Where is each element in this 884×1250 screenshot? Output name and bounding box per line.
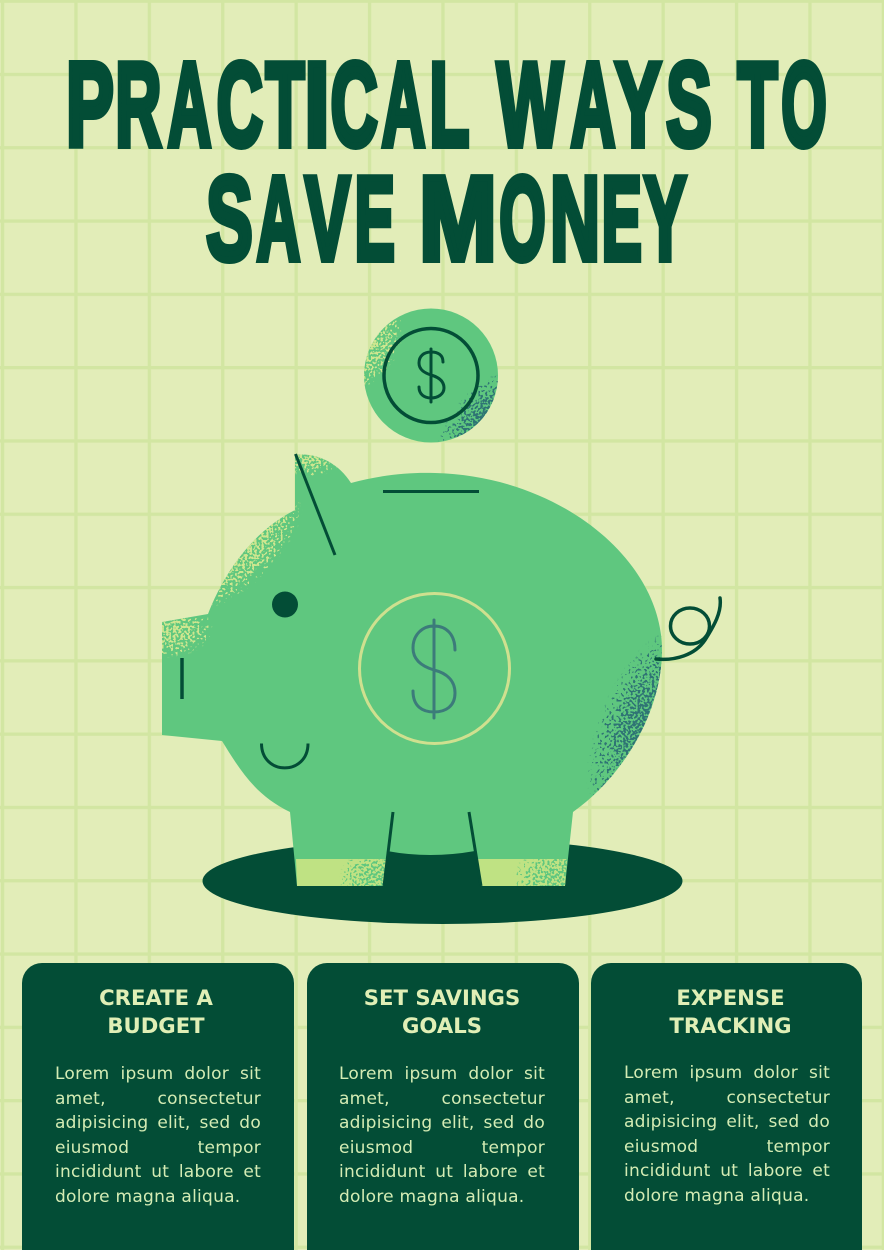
heading: GOALS <box>402 1013 482 1038</box>
heading <box>364 985 520 1038</box>
body text: amet, consectetur <box>55 1089 261 1109</box>
heading <box>99 985 213 1038</box>
body text: incididunt ut labore et <box>55 1162 261 1182</box>
coin slot <box>383 490 479 493</box>
body text <box>624 1063 830 1206</box>
heading <box>669 985 792 1038</box>
leg lines <box>384 812 481 886</box>
title: Y <box>644 152 686 286</box>
hoof speckle <box>340 859 567 886</box>
heading: BUDGET <box>107 1013 205 1038</box>
piggy bank <box>162 454 722 886</box>
title: A <box>571 38 615 172</box>
snout line <box>180 658 184 699</box>
icon: falling coin <box>364 308 498 442</box>
ground shadow <box>202 838 682 924</box>
body speckle <box>162 454 662 795</box>
body text: incididunt ut labore et <box>339 1162 545 1182</box>
heading: CREATE A <box>99 985 213 1010</box>
body text: adipisicing elit, sed do <box>624 1112 830 1132</box>
body text: dolore magna aliqua. <box>624 1186 809 1206</box>
body text <box>339 1064 545 1207</box>
title: O <box>499 152 546 286</box>
body text: amet, consectetur <box>339 1089 545 1109</box>
title: P <box>66 38 114 172</box>
title: T <box>266 38 304 172</box>
title: T <box>738 38 777 172</box>
body text: adipisicing elit, sed do <box>339 1113 545 1133</box>
heading: SET SAVINGS <box>364 985 520 1010</box>
body text: dolore magna aliqua. <box>339 1187 524 1207</box>
title: I <box>304 38 330 172</box>
body text: Lorem ipsum dolor sit <box>55 1064 261 1084</box>
title: E <box>602 152 642 286</box>
body text: eiusmod tempor <box>55 1138 261 1158</box>
body text: incididunt ut labore et <box>624 1161 830 1181</box>
title <box>66 38 827 286</box>
title: A <box>168 38 211 172</box>
ear line <box>296 454 335 555</box>
title: S <box>666 38 712 172</box>
body text: Lorem ipsum dolor sit <box>624 1063 830 1083</box>
text: O <box>781 38 827 172</box>
title: S <box>206 152 253 286</box>
title: N <box>550 152 600 286</box>
panel: create a budget <box>22 963 294 1250</box>
title: A <box>257 152 300 286</box>
pig body <box>162 454 662 886</box>
title: C <box>217 38 263 172</box>
title: R <box>115 38 161 172</box>
body text: Lorem ipsum dolor sit <box>339 1064 545 1084</box>
title: W <box>497 38 563 172</box>
body text: adipisicing elit, sed do <box>55 1113 261 1133</box>
body text <box>55 1064 261 1207</box>
body text: eiusmod tempor <box>339 1138 545 1158</box>
heading: EXPENSE <box>676 985 785 1010</box>
title: C <box>331 38 378 172</box>
heading: TRACKING <box>669 1013 792 1038</box>
title: V <box>305 152 350 286</box>
eye <box>272 592 298 618</box>
body text: amet, consectetur <box>624 1088 830 1108</box>
body text: eiusmod tempor <box>624 1137 830 1157</box>
title: L <box>430 38 468 172</box>
title: E <box>355 152 395 286</box>
panel: expense tracking <box>591 963 862 1250</box>
hooves <box>296 859 567 886</box>
tail <box>656 598 720 659</box>
title: M <box>419 152 497 286</box>
title: Y <box>615 38 661 172</box>
smile <box>262 744 308 768</box>
body dollar emblem <box>360 594 510 744</box>
title: A <box>382 38 425 172</box>
body text: dolore magna aliqua. <box>55 1187 240 1207</box>
panel: set savings goals <box>307 963 579 1250</box>
